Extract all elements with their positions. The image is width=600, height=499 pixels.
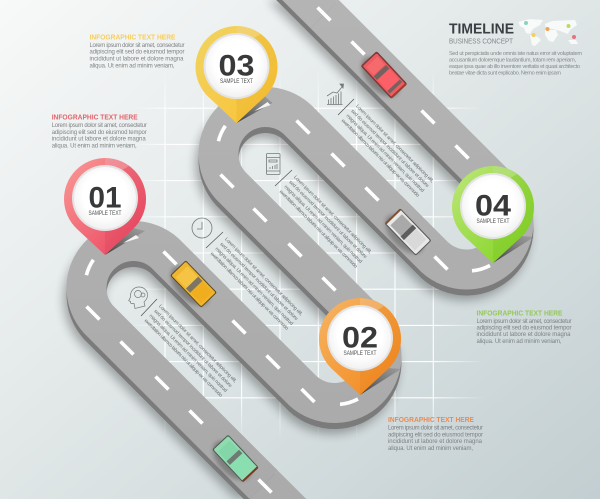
title: BUSINESS CONCEPT bbox=[449, 36, 513, 45]
rotated text block 4: exercitation ullamco laboris nisi ut aliquip ex ea commodo bbox=[340, 118, 421, 199]
background grid bbox=[130, 70, 485, 440]
rotated text block 2: exercitation ullamco laboris nisi ut aliquip ex ea commodo bbox=[209, 251, 290, 332]
intro paragraph: eaque ipsa quae ab illo inventore veritatis et quasi architecto bbox=[449, 64, 580, 70]
text block: yellow: INFOGRAPHIC TEXT HERE bbox=[90, 32, 176, 42]
rotated text block 3: sed do eiusmod tempor incididunt ut labore et dolore bbox=[287, 179, 368, 260]
world map bbox=[518, 19, 578, 46]
text block: orange: aliqua. Ut enim ad minim veniam, bbox=[388, 446, 473, 452]
text block: orange: Lorem ipsum dolor sit amet, consectetur bbox=[388, 426, 483, 432]
icon: head with gears bbox=[129, 287, 148, 308]
car: red bbox=[355, 49, 408, 103]
pin 04: SAMPLE TEXT bbox=[476, 219, 510, 225]
intro paragraph: Sed ut perspiciatis unde omnis iste natus error sit voluptatem bbox=[449, 51, 582, 57]
intro paragraph: accusantium doloremque laudantium, totam rem aperiam, bbox=[449, 57, 576, 63]
car: green bbox=[206, 433, 259, 487]
text block: orange: adipiscing elit sed do eiusmod tempor bbox=[388, 432, 483, 438]
rotated text block 4: magna aliqua. Ut enim ad minim veniam, quis nostrud bbox=[345, 113, 425, 194]
car: yellow bbox=[164, 258, 217, 312]
text block: red: adipiscing elit sed do eiusmod tempor bbox=[52, 130, 147, 136]
text block: yellow: incididunt ut labore et dolore magna bbox=[90, 56, 184, 62]
rotated text block 1: exercitation ullamco laboris nisi ut aliquip ex ea commodo bbox=[143, 318, 224, 399]
icon: mobile phone with chart bbox=[266, 154, 280, 174]
text block: red: INFOGRAPHIC TEXT HERE bbox=[52, 112, 138, 122]
rotated text block 1: Lorem ipsum dolor sit amet, consectetur adipiscing elit, bbox=[157, 304, 238, 384]
pin 04 bbox=[452, 166, 534, 263]
text block: red: aliqua. Ut enim ad minim veniam, bbox=[52, 143, 137, 149]
road bbox=[84, 0, 513, 499]
text block: red: Lorem ipsum dolor sit amet, consectetur bbox=[52, 123, 147, 129]
intro paragraph: beatae vitae dicta sunt explicabo. Nemo enim ipsam bbox=[449, 70, 561, 76]
pin 03: 03 bbox=[218, 50, 254, 82]
rotated text block 1: sed do eiusmod tempor incididunt ut labore et dolore bbox=[152, 308, 233, 389]
text block: orange bbox=[388, 415, 483, 452]
text block: orange: incididunt ut labore et dolore magna bbox=[388, 439, 483, 445]
pin 01 bbox=[64, 158, 146, 255]
text block: orange: INFOGRAPHIC TEXT HERE bbox=[388, 415, 474, 424]
pin 02 bbox=[319, 298, 401, 395]
intro paragraph bbox=[449, 51, 582, 76]
text block: yellow bbox=[90, 32, 184, 69]
pin 02: 02 bbox=[342, 322, 378, 354]
rotated text block 2: sed do eiusmod tempor incididunt ut labore et dolore bbox=[218, 241, 299, 322]
title: TIMELINE bbox=[449, 22, 514, 38]
text block: red bbox=[52, 112, 147, 149]
rotated text block 3: exercitation ullamco laboris nisi ut aliquip ex ea commodo bbox=[278, 189, 359, 270]
rotated text block 2: Lorem ipsum dolor sit amet, consectetur adipiscing elit, bbox=[223, 237, 304, 317]
pin 04: 04 bbox=[475, 190, 511, 222]
rotated text block 4: sed do eiusmod tempor incididunt ut labore et dolore bbox=[349, 108, 430, 189]
rotated text block 3: magna aliqua. Ut enim ad minim veniam, quis nostrud bbox=[283, 184, 363, 265]
text block: green: Lorem ipsum dolor sit amet, consectetur bbox=[476, 319, 572, 325]
rotated text block 4: Lorem ipsum dolor sit amet, consectetur adipiscing elit, bbox=[354, 104, 435, 184]
road lane dashes bbox=[86, 8, 490, 492]
pin 01: 01 bbox=[88, 182, 122, 214]
pin 02: SAMPLE TEXT bbox=[344, 351, 377, 357]
text block: yellow: adipiscing elit sed do eiusmod tempor bbox=[90, 50, 184, 56]
icon: clock bbox=[192, 218, 212, 238]
title bbox=[449, 22, 514, 45]
text block: green: INFOGRAPHIC TEXT HERE bbox=[476, 308, 563, 318]
rotated text block 2: magna aliqua. Ut enim ad minim veniam, quis nostrud bbox=[214, 246, 294, 327]
rotated text block 1: magna aliqua. Ut enim ad minim veniam, quis nostrud bbox=[148, 313, 228, 394]
text block: green: aliqua. Ut enim ad minim veniam, bbox=[476, 339, 562, 345]
pin 01: SAMPLE TEXT bbox=[88, 211, 122, 217]
rotated text block 3: Lorem ipsum dolor sit amet, consectetur adipiscing elit, bbox=[292, 175, 373, 255]
text block: green bbox=[476, 308, 572, 345]
text block: green: incididunt ut labore et dolore magna bbox=[476, 332, 571, 338]
icon: rising bar chart bbox=[327, 84, 344, 104]
pin 03 bbox=[196, 26, 278, 123]
text block: yellow: Lorem ipsum dolor sit amet, consectetur bbox=[90, 43, 184, 49]
text block: green: adipiscing elit sed do eiusmod tempor bbox=[476, 326, 572, 332]
text block: yellow: aliqua. Ut enim ad minim veniam, bbox=[90, 63, 175, 69]
pin 03: SAMPLE TEXT bbox=[220, 79, 253, 85]
text block: red: incididunt ut labore et dolore magna bbox=[52, 137, 146, 143]
car: white bbox=[378, 206, 432, 260]
